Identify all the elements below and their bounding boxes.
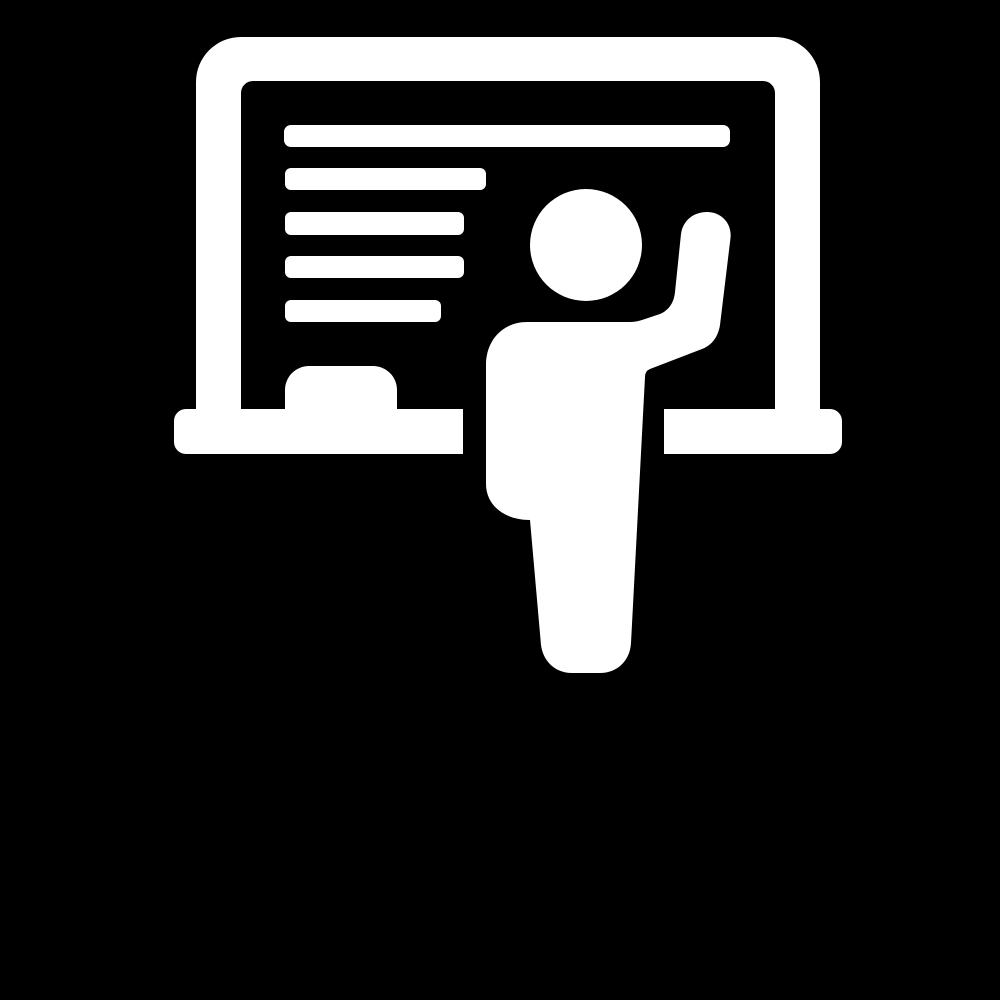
text line 2 xyxy=(285,168,486,190)
icon: teacher body and raised arm xyxy=(486,212,731,673)
text line 4 xyxy=(285,256,464,278)
text line 3 xyxy=(285,212,464,235)
icon: teacher head xyxy=(530,189,642,301)
icon: blackboard frame xyxy=(174,37,842,454)
text line 1 xyxy=(284,125,730,147)
text line 5 xyxy=(285,300,441,322)
